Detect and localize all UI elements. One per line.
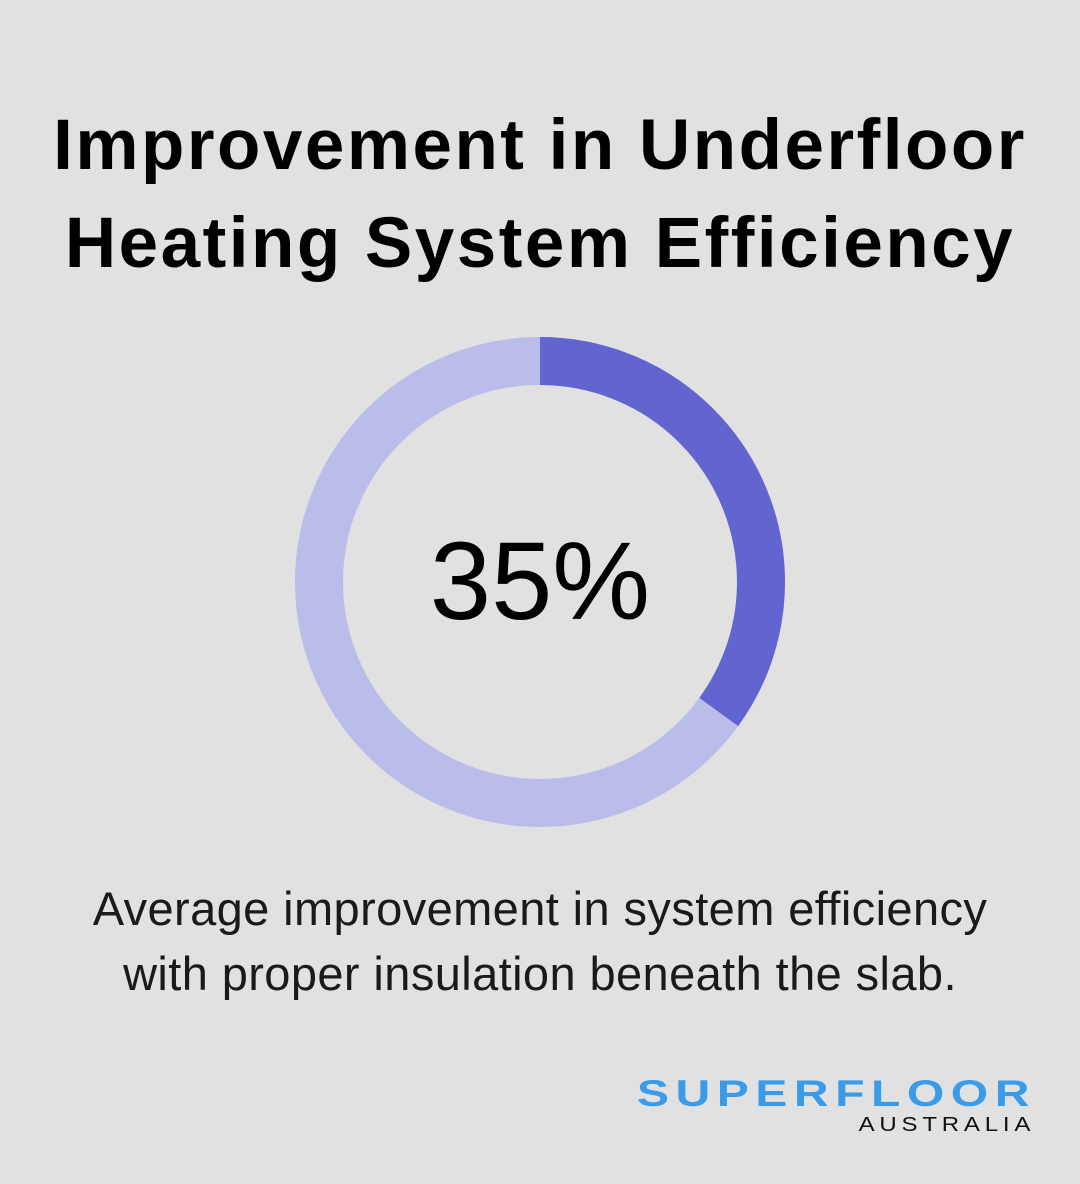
caption (92, 882, 987, 1000)
logo: AUSTRALIA (858, 1114, 1035, 1136)
title (53, 106, 1027, 283)
logo: SUPERFLOOR (637, 1073, 1036, 1114)
value: 35% (430, 520, 650, 643)
title: Improvement in Underfloor (53, 106, 1027, 185)
title: Heating System Efficiency (65, 204, 1015, 283)
logo (637, 1073, 1036, 1136)
caption: Average improvement in system efficiency (93, 882, 987, 935)
caption: with proper insulation beneath the slab. (123, 947, 957, 1000)
